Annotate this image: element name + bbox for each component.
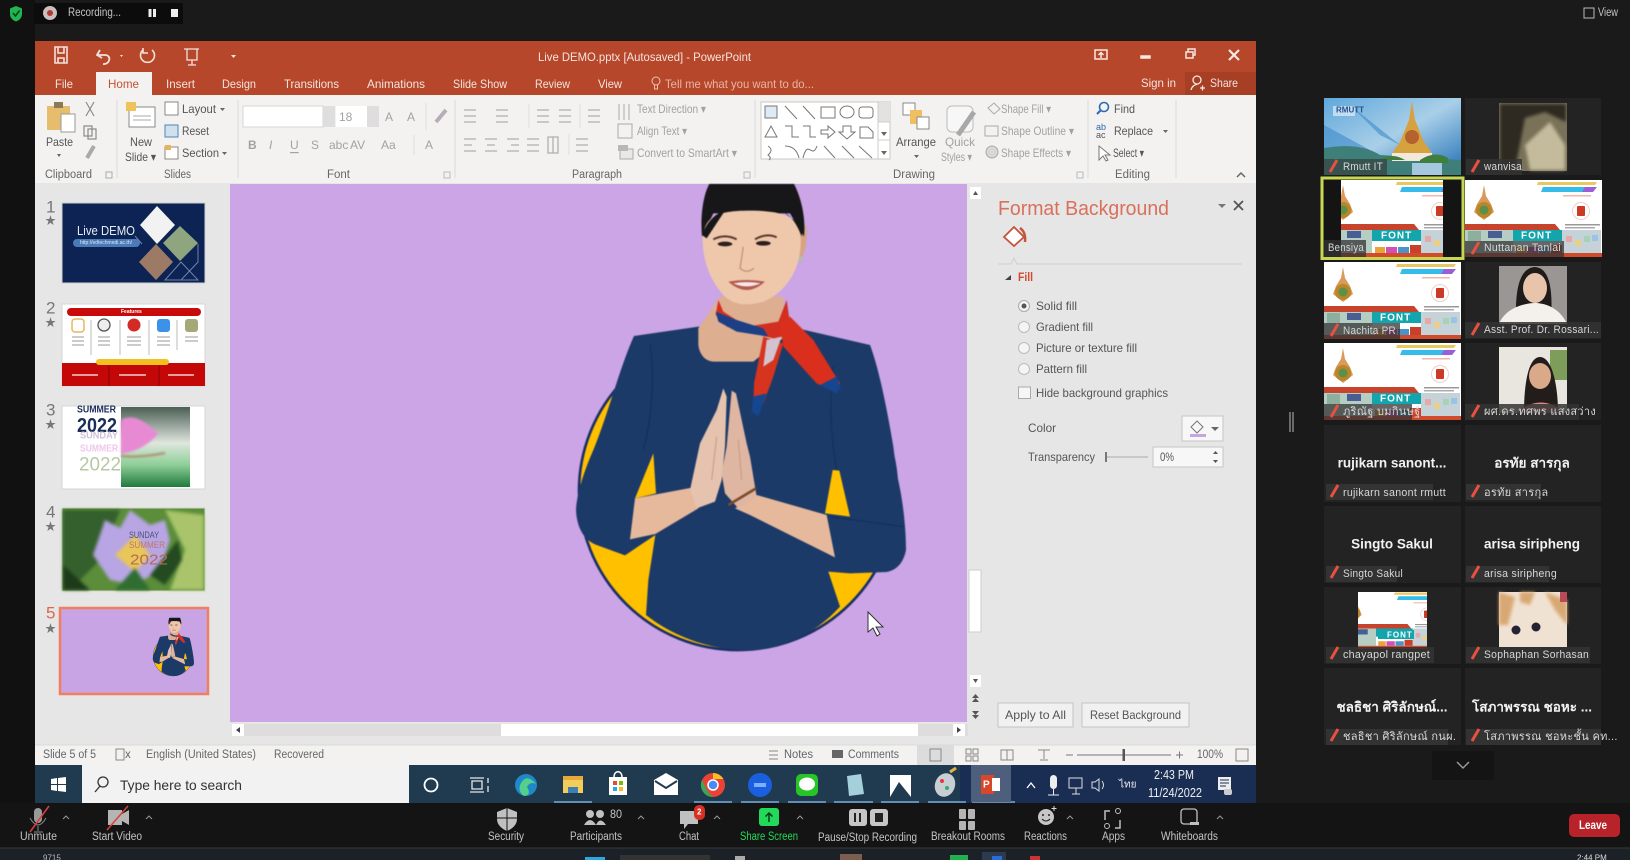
tile: rujikarn sanont: rujikarn sanont... xyxy=(1338,456,1446,470)
group: font: A xyxy=(407,110,415,124)
group: font: B xyxy=(248,138,257,152)
slide numbers and transition stars: 2 xyxy=(46,298,55,318)
group: clipboard: Clipboard xyxy=(45,169,92,181)
thumbnail 4: purple lotus xyxy=(62,508,205,591)
group: editing xyxy=(1096,102,1245,181)
status bar: Slide 5 of 5 xyxy=(43,749,96,761)
vertical scrollbar xyxy=(967,184,983,722)
quick styles button xyxy=(941,106,976,164)
tile: Thai name with slide xyxy=(1324,343,1461,420)
group: editing: ab xyxy=(1096,122,1106,132)
tile: chayapol rangpet xyxy=(1324,587,1461,664)
apps button: Apps xyxy=(1102,831,1125,843)
icon: redo xyxy=(140,48,155,62)
group: font: S xyxy=(311,138,319,152)
pane close controls xyxy=(1218,201,1243,210)
status bar: English (United States) xyxy=(146,749,256,761)
group: paragraph xyxy=(464,102,750,181)
tile: Sophaphan Sorhasan xyxy=(1465,587,1601,664)
thumbnail 5: selected slide xyxy=(60,608,208,694)
status bar xyxy=(35,745,1256,765)
presenter illustration xyxy=(576,184,906,650)
powerpoint window xyxy=(35,41,1256,765)
tell me search: Tell me what you want to do... xyxy=(665,77,814,91)
tile: Rmutt IT: Rmutt IT xyxy=(1343,161,1383,173)
participants button xyxy=(570,809,644,843)
tile: Singto Sakul: Singto Sakul xyxy=(1343,568,1403,580)
thumbnail 1: live demo: Live DEMO xyxy=(77,224,135,238)
fill options: Hide background graphics xyxy=(1036,386,1168,400)
powerpoint taskbar button: P xyxy=(983,780,990,790)
tile: Thai name with slide: FONT xyxy=(1380,394,1411,404)
tile: rujikarn sanont xyxy=(1324,425,1461,502)
slide numbers and transition stars: ★ xyxy=(45,623,56,635)
group: editing: ac xyxy=(1096,130,1106,140)
group: font xyxy=(243,103,450,181)
whiteboards button: Whiteboards xyxy=(1161,831,1218,843)
transparency row xyxy=(1028,447,1223,467)
thumbnail 1: live demo: http://edtechmedi.ac.th/ xyxy=(80,240,133,246)
tile: chayapol rangpet: FONT xyxy=(1387,630,1413,640)
fill section heading xyxy=(1005,272,1033,284)
tile: Nachita PR: FONT xyxy=(1380,312,1411,324)
leave button xyxy=(1569,814,1620,837)
shape format commands: Shape Fill ▾ xyxy=(1001,102,1051,116)
slide numbers and transition stars: 3 xyxy=(46,400,55,420)
thumbnail 3: summer 2022: 2022 xyxy=(79,454,121,476)
tile: Rmutt IT: RMUTT xyxy=(1336,106,1364,114)
reset background button: Reset Background xyxy=(1090,708,1181,722)
tile: Asst. Prof. Dr. Rossari: Asst. Prof. Dr. Rossari... xyxy=(1484,324,1599,336)
tile: Nuttanan Tanlai: Nuttanan Tanlai xyxy=(1484,242,1561,254)
running app underlines xyxy=(554,801,1015,803)
group: paragraph: Paragraph xyxy=(572,169,622,181)
fill options xyxy=(1018,299,1168,400)
fill options: Pattern fill xyxy=(1036,362,1087,376)
slide numbers and transition stars: 5 xyxy=(46,604,55,622)
slide numbers and transition stars: ★ xyxy=(45,317,56,329)
tile: Thai name 3: โสภาพรรณ ชอหะ ... xyxy=(1471,698,1592,714)
participants button: 80 xyxy=(610,809,622,821)
arrange button: Arrange xyxy=(896,135,936,149)
quick access dropdown xyxy=(120,53,236,58)
share screen button xyxy=(740,808,803,843)
participants button: Participants xyxy=(570,831,622,843)
panel resize handle xyxy=(1290,412,1293,432)
icon: undo xyxy=(97,50,109,64)
document title: Live DEMO.pptx [Autosaved] - PowerPoint xyxy=(538,50,752,64)
slide numbers and transition stars: ★ xyxy=(45,215,56,227)
start video button xyxy=(92,806,152,843)
group: slides: Slides xyxy=(164,169,191,181)
share button: Share xyxy=(1210,76,1238,90)
participants gallery xyxy=(1322,98,1618,780)
slide numbers and transition stars: ★ xyxy=(45,419,56,431)
fill section heading: Fill xyxy=(1018,272,1033,284)
zoom toolbar xyxy=(0,803,1630,848)
icon: presentation xyxy=(184,49,199,65)
thumbnail 2: red agenda xyxy=(62,304,205,386)
thumbnail 4: purple lotus: SUMMER xyxy=(129,540,165,550)
security button: Security xyxy=(488,831,524,843)
transparency row: 0% xyxy=(1160,450,1174,464)
view button: View xyxy=(1598,7,1619,19)
pane heading: Format Background xyxy=(998,198,1169,220)
tile: rujikarn sanont: rujikarn sanont rmutt xyxy=(1343,487,1446,499)
share screen button: Share Screen xyxy=(740,831,798,843)
group: editing: Select ▾ xyxy=(1113,146,1144,160)
fill options: Picture or texture fill xyxy=(1036,341,1137,355)
tile: Nachita PR: Nachita PR xyxy=(1343,325,1396,337)
transparency row: Transparency xyxy=(1028,450,1095,464)
ribbon tabs: Insert xyxy=(166,77,196,91)
system tray: 11/24/2022 xyxy=(1148,786,1202,800)
group: editing: Replace xyxy=(1114,124,1153,138)
group: slides: New xyxy=(130,135,152,149)
security button xyxy=(488,808,524,843)
recording indicator xyxy=(10,3,183,24)
group: drawing shapes gallery xyxy=(761,102,890,160)
group: slides: Reset xyxy=(182,124,210,138)
group: slides: Section xyxy=(182,146,219,160)
group: font: A xyxy=(425,138,433,152)
tab: home active: Home xyxy=(108,77,139,91)
thumbnail 4: purple lotus: 2022 xyxy=(130,552,168,568)
quick styles button: Styles ▾ xyxy=(941,150,972,164)
tile: Thai name 1 xyxy=(1465,425,1601,502)
tile: Bensiya active speaker: Bensiya xyxy=(1328,242,1365,254)
unmute button: Unmute xyxy=(20,831,57,843)
tile: Nachita PR xyxy=(1324,262,1461,339)
shape format commands: Drawing xyxy=(893,169,935,181)
group: clipboard: Paste xyxy=(46,135,73,149)
tile: Thai name 1: อรทัย สารกุล xyxy=(1494,456,1570,472)
sign in: Sign in xyxy=(1141,76,1176,90)
group: slides: Slide ▾ xyxy=(125,150,156,164)
tile: Thai name 3 xyxy=(1465,668,1618,745)
group: paragraph: Text Direction ▾ xyxy=(637,102,706,116)
powerpoint taskbar button xyxy=(971,765,1011,802)
search box: Type here to search xyxy=(120,777,242,793)
tile: Bensiya active speaker: FONT xyxy=(1381,230,1412,242)
icon: paint bucket xyxy=(1004,227,1025,246)
tile: arisa siripheng: arisa siripheng xyxy=(1484,568,1557,580)
leave button: Leave xyxy=(1579,818,1607,832)
system tray: ไทย xyxy=(1118,778,1136,790)
thumbnail 3: summer 2022: 2022 xyxy=(77,415,117,437)
system tray: 2:43 PM xyxy=(1154,768,1194,782)
tile: arisa siripheng: arisa siripheng xyxy=(1484,536,1580,552)
apply to all button xyxy=(998,703,1073,727)
chat button xyxy=(679,805,720,843)
ribbon tabs: Transitions xyxy=(284,77,339,91)
shape format commands xyxy=(893,102,1083,181)
shape format commands: Shape Effects ▾ xyxy=(1001,146,1071,160)
group: editing: Find xyxy=(1114,102,1135,116)
group: font: 18 xyxy=(339,110,353,124)
status bar: Recovered xyxy=(274,749,324,761)
group: slides: Layout xyxy=(182,102,217,116)
tile: Thai name 2: ชลธิชา ศิริลักษณ์ กนผ. xyxy=(1343,730,1456,743)
tile: Sophaphan Sorhasan: Sophaphan Sorhasan xyxy=(1484,649,1589,661)
thumbnail 1: live demo xyxy=(62,203,205,283)
search box xyxy=(82,765,409,803)
slide numbers and transition stars: 1 xyxy=(46,198,55,216)
window controls xyxy=(1095,49,1239,60)
tile: Nuttanan Tanlai xyxy=(1465,180,1602,257)
tile: Rmutt IT xyxy=(1324,98,1461,175)
tile: Thai name 3: โสภาพรรณ ชอหะชั้น คท... xyxy=(1484,728,1618,743)
underlying desktop taskbar strip xyxy=(0,848,1630,860)
tile: Asst. Prof. Dr. Rossari xyxy=(1465,262,1601,339)
tile: Thai name with slide: ภูริณัฐ บมกินษฐ์ xyxy=(1343,405,1421,418)
view button xyxy=(1584,7,1619,19)
status bar: Comments xyxy=(848,749,899,761)
arrange button xyxy=(896,103,936,158)
mouse cursor xyxy=(868,612,883,636)
quick styles button: Quick xyxy=(945,135,976,149)
reset background button xyxy=(1082,703,1189,727)
group: editing: Editing xyxy=(1115,169,1150,181)
tab: home active xyxy=(96,72,152,96)
group: font: AV xyxy=(350,138,365,152)
chat button: Chat xyxy=(679,831,700,843)
unmute button xyxy=(20,806,69,843)
icon: save xyxy=(55,47,67,63)
apps button xyxy=(1102,808,1125,843)
tile: Singto Sakul xyxy=(1324,506,1461,583)
horizontal scrollbar xyxy=(232,724,968,736)
breakout rooms button xyxy=(931,809,1005,843)
tile: Thai name with video xyxy=(1465,343,1601,420)
tile: wanvisa xyxy=(1465,98,1601,175)
tile: arisa siripheng xyxy=(1465,506,1601,583)
tile: wanvisa: wanvisa xyxy=(1483,161,1523,173)
color picker row: Color xyxy=(1028,421,1056,435)
thumbnail 3: summer 2022: SUMMER xyxy=(77,404,117,416)
ribbon tabs: Slide Show xyxy=(453,77,507,91)
tab: file: File xyxy=(55,77,73,91)
color picker row xyxy=(1028,416,1223,441)
windows taskbar xyxy=(35,765,1256,803)
thumbnail pane xyxy=(35,183,227,745)
tile: chayapol rangpet: chayapol rangpet xyxy=(1343,649,1430,661)
tile: Thai name 1: อรทัย สารกุล xyxy=(1484,487,1548,499)
group: font: Aa xyxy=(381,138,396,152)
slide canvas xyxy=(227,183,983,745)
tile: Thai name with video: ผศ.ดร.ทศพร แสงสว่าง xyxy=(1484,406,1596,418)
tile: Thai name 2 xyxy=(1324,668,1461,745)
share button xyxy=(1185,72,1256,95)
whiteboards button xyxy=(1161,809,1223,843)
group: slides xyxy=(125,102,227,181)
tile: Singto Sakul: Singto Sakul xyxy=(1351,536,1433,552)
status bar: x xyxy=(125,749,131,761)
slide numbers and transition stars: ★ xyxy=(45,521,56,533)
status bar: Notes xyxy=(784,749,813,761)
ribbon tabs: Review xyxy=(535,77,570,91)
tile: Thai name 2: ชลธิชา ศิริลักษณ์... xyxy=(1336,698,1448,714)
title bar xyxy=(35,41,1256,96)
pause stop recording button: Pause/Stop Recording xyxy=(818,832,917,844)
reactions button: Reactions xyxy=(1024,831,1067,843)
ribbon tabs: Animations xyxy=(367,77,425,91)
thumbnail 3: summer 2022 xyxy=(62,404,205,489)
group: font: U xyxy=(290,138,299,152)
icon: start button xyxy=(51,777,66,792)
group: font: abc xyxy=(329,138,348,152)
group: paragraph: Align Text ▾ xyxy=(637,124,687,138)
tile: Bensiya active speaker xyxy=(1322,178,1463,258)
tile: Nuttanan Tanlai: FONT xyxy=(1521,230,1552,242)
ribbon tabs: View xyxy=(598,77,622,91)
chat button: 2 xyxy=(697,808,702,816)
thumbnail 2: red agenda: Features xyxy=(121,309,142,315)
taskbar app icons xyxy=(424,768,959,800)
start video button: Start Video xyxy=(92,831,142,843)
system tray xyxy=(1027,768,1232,800)
shape format commands: Shape Outline ▾ xyxy=(1001,124,1074,138)
pause stop recording button xyxy=(818,809,917,844)
breakout rooms button: Breakout Rooms xyxy=(931,831,1005,843)
group: paragraph: Convert to SmartArt ▾ xyxy=(637,146,737,160)
next page chevron xyxy=(1432,751,1494,780)
recording indicator: Recording... xyxy=(68,7,121,19)
ribbon tabs xyxy=(166,77,622,91)
group: font: I xyxy=(269,138,273,152)
fill options: Gradient fill xyxy=(1036,320,1093,334)
thumbnail 3: summer 2022: SUMMER xyxy=(80,444,119,454)
group: font: Font xyxy=(327,169,351,181)
thumbnail 3: summer 2022: SUNDAY xyxy=(80,430,118,442)
thumbnail 4: purple lotus: SUNDAY xyxy=(129,530,159,540)
status bar: 100% xyxy=(1197,749,1223,761)
slide numbers and transition stars xyxy=(45,198,56,635)
fill options: Solid fill xyxy=(1036,299,1077,313)
format background pane xyxy=(983,183,1256,745)
group: font: A xyxy=(385,110,393,124)
slide numbers and transition stars: 4 xyxy=(46,502,55,522)
apply to all button: Apply to All xyxy=(1005,708,1066,722)
ribbon xyxy=(35,95,1256,183)
group: clipboard xyxy=(45,102,112,181)
ribbon tabs: Design xyxy=(222,77,256,91)
reactions button xyxy=(1024,806,1073,843)
